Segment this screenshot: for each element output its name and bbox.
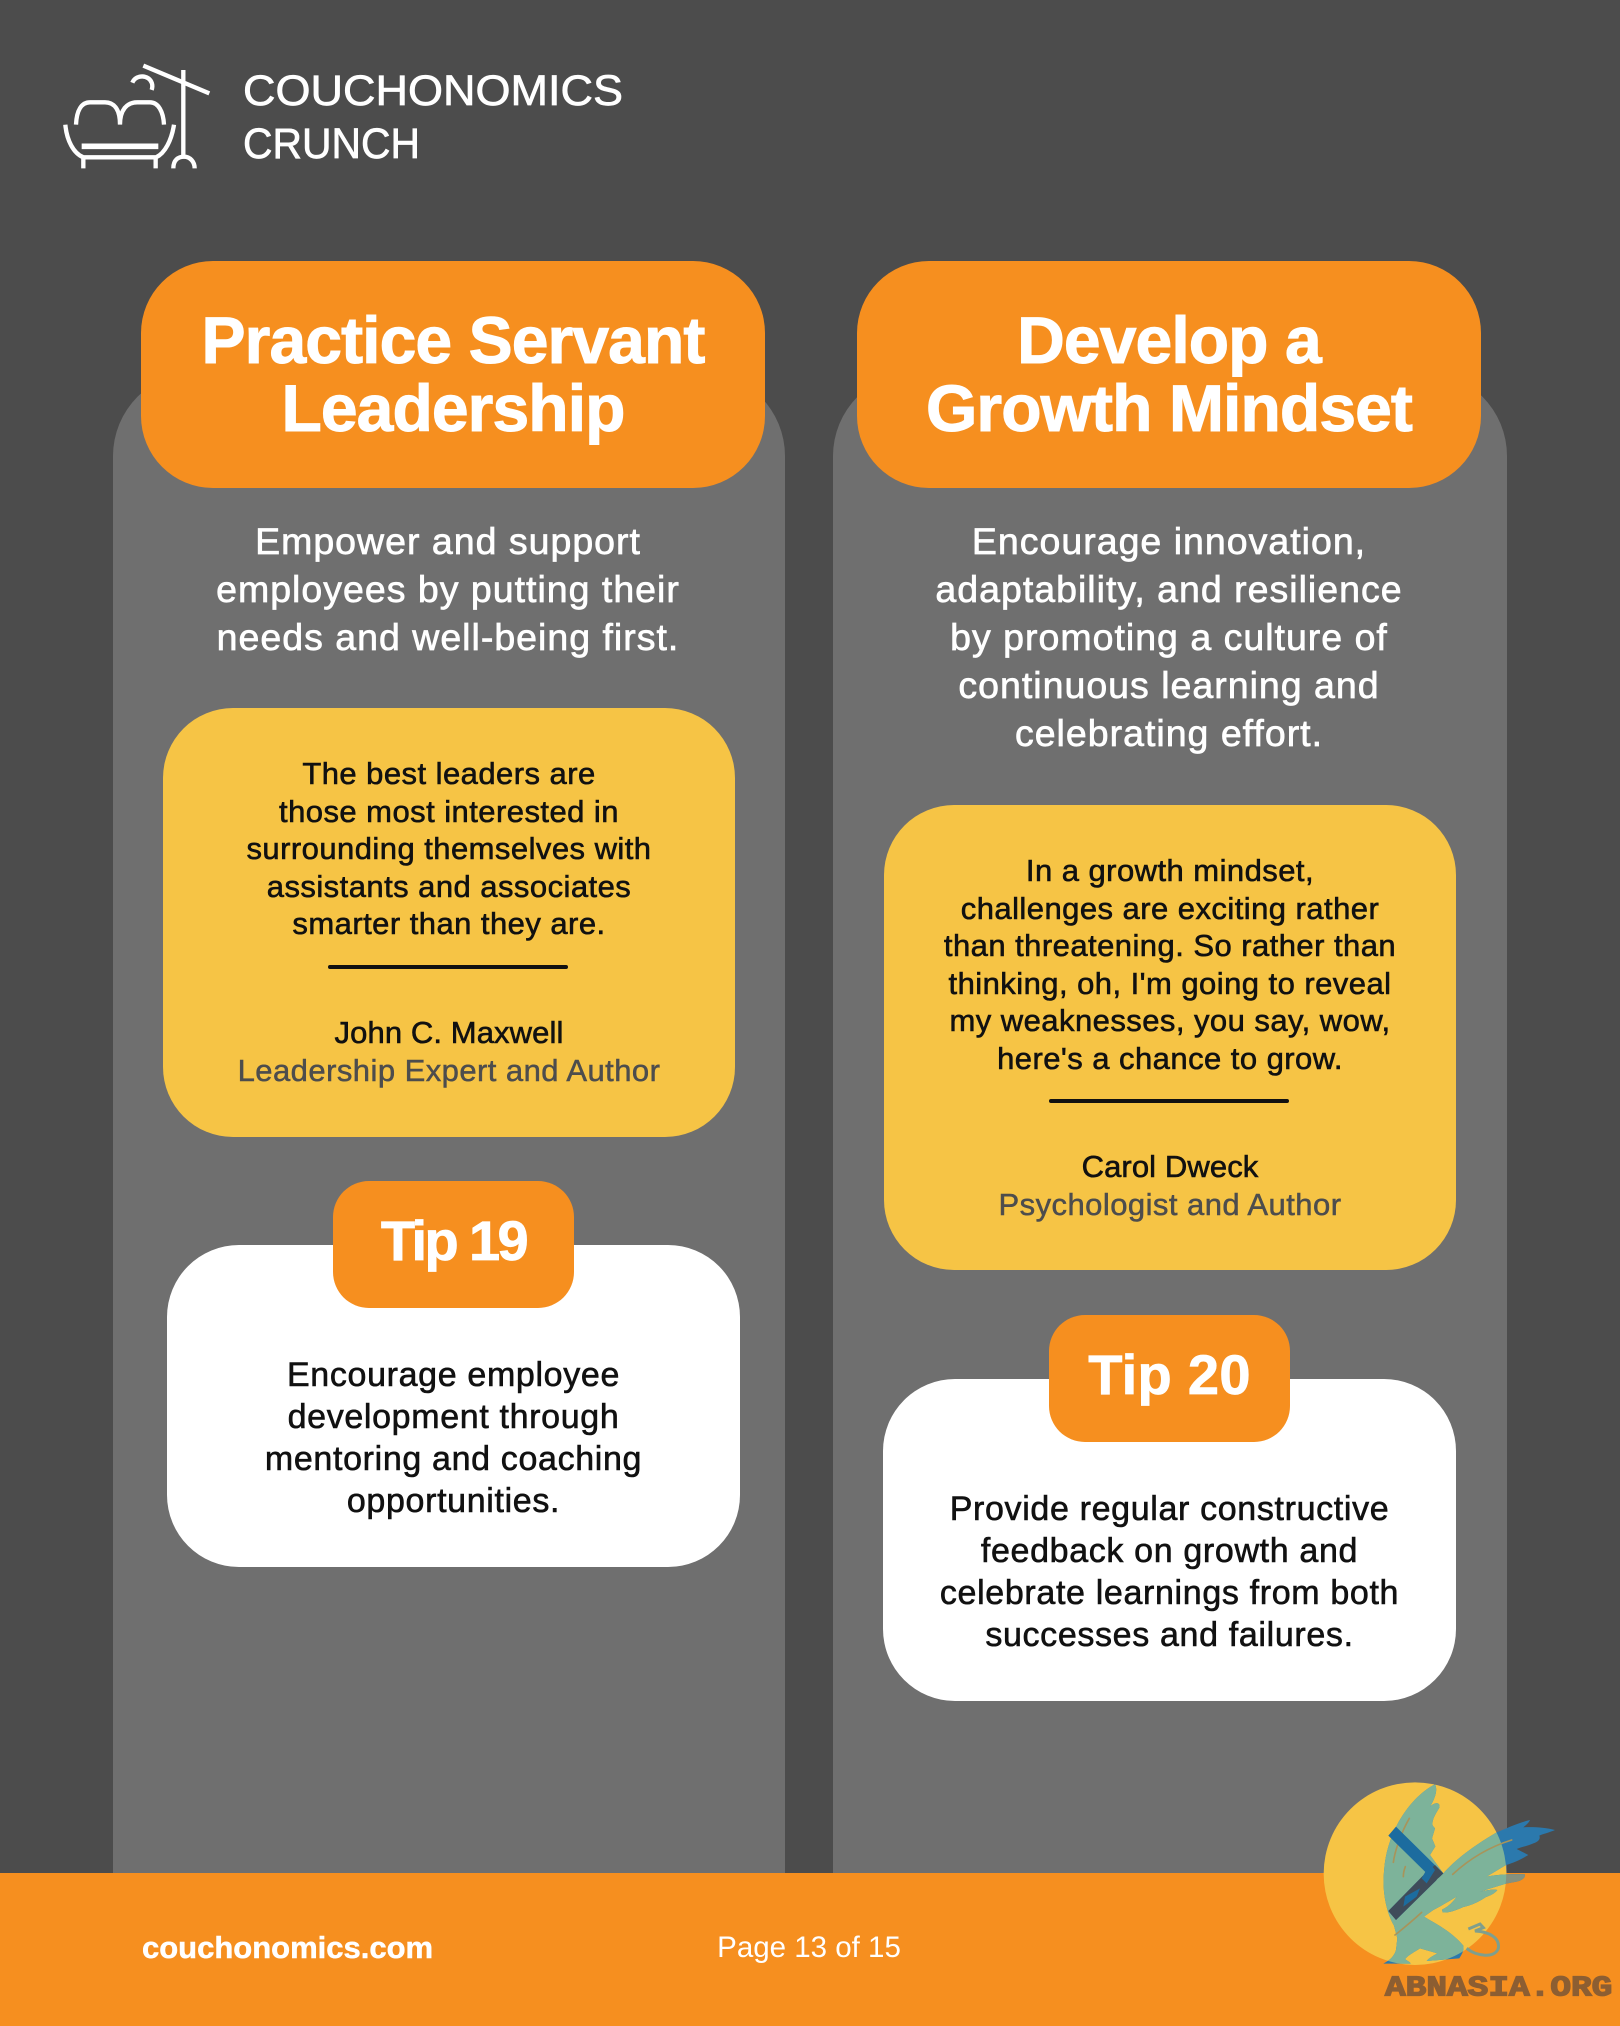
text block: right description: Encourage innovation, bbox=[972, 520, 1366, 562]
badge: Tip 19 bbox=[333, 1181, 574, 1308]
footer bar bbox=[0, 1873, 1620, 2026]
logo text: CRUNCH bbox=[243, 120, 420, 168]
logo text: COUCHONOMICS bbox=[243, 67, 623, 115]
heading: Develop a Growth Mindset bbox=[857, 261, 1481, 488]
quote text: smarter than they are. bbox=[292, 906, 606, 941]
tip text: successes and failures. bbox=[985, 1616, 1354, 1654]
text block: left description bbox=[216, 520, 680, 658]
panel: tip 20 text card bbox=[883, 1379, 1456, 1701]
text block: right description: continuous learning and bbox=[958, 664, 1380, 706]
tip text: opportunities. bbox=[347, 1482, 560, 1520]
heading: Practice Servant Leadership bbox=[141, 261, 765, 488]
logo text bbox=[243, 67, 623, 168]
panel: left column background bbox=[113, 372, 785, 1892]
quote text: my weaknesses, you say, wow, bbox=[949, 1003, 1391, 1038]
badge: Tip 20 bbox=[1049, 1315, 1290, 1442]
text block: right description bbox=[935, 520, 1403, 754]
text block: left description: employees by putting their bbox=[216, 568, 680, 610]
tip text: Encourage employee bbox=[287, 1356, 620, 1394]
footer website: couchonomics.com bbox=[142, 1930, 433, 1965]
quote text bbox=[246, 756, 652, 941]
logo bbox=[63, 64, 623, 168]
watermark: griffin emblem bbox=[1324, 1782, 1612, 2004]
panel: Carol Dweck quote bbox=[884, 805, 1456, 1270]
tip text bbox=[940, 1490, 1399, 1654]
heading: Practice Servant Leadership: Practice Servant bbox=[202, 303, 704, 377]
tip text bbox=[265, 1356, 642, 1520]
quote text: In a growth mindset, bbox=[1026, 853, 1314, 888]
panel: John C. Maxwell quote bbox=[163, 708, 735, 1137]
text block: right description: celebrating effort. bbox=[1015, 712, 1323, 754]
griffin silhouette bbox=[1383, 1784, 1555, 1964]
quote text bbox=[944, 853, 1396, 1076]
chevron mark bbox=[1388, 1827, 1443, 1920]
quote text: The best leaders are bbox=[302, 756, 596, 791]
griffin tail bbox=[1467, 1924, 1499, 1955]
heading: Practice Servant Leadership: Leadership bbox=[281, 371, 625, 445]
quote text: thinking, oh, I'm going to reveal bbox=[949, 966, 1391, 1001]
quote text: those most interested in bbox=[279, 794, 619, 829]
panel: right column background bbox=[833, 372, 1507, 1892]
badge: Tip 20: Tip 20 bbox=[1088, 1343, 1251, 1406]
wing over chevron tip bbox=[1420, 1873, 1444, 1903]
quote attribution: Psychologist and Author bbox=[999, 1187, 1341, 1222]
quote attribution: Carol Dweck bbox=[1082, 1149, 1258, 1184]
quote attribution: John C. Maxwell bbox=[335, 1015, 563, 1050]
tip text: feedback on growth and bbox=[981, 1532, 1358, 1570]
icon: couch and floor lamp bbox=[65, 66, 209, 168]
quote text: challenges are exciting rather bbox=[961, 891, 1379, 926]
text block: left description: Empower and support bbox=[255, 520, 641, 562]
feather accents bbox=[1393, 1818, 1512, 1935]
text block: left description: needs and well-being first. bbox=[217, 616, 679, 658]
heading: Develop a Growth Mindset: Develop a bbox=[1017, 303, 1321, 377]
quote attribution: Leadership Expert and Author bbox=[238, 1053, 660, 1088]
heading: Develop a Growth Mindset: Growth Mindset bbox=[926, 371, 1412, 445]
quote attribution bbox=[238, 1015, 660, 1088]
panel: tip 19 text card bbox=[167, 1245, 740, 1567]
quote text: than threatening. So rather than bbox=[944, 928, 1396, 963]
tip text: development through bbox=[288, 1398, 619, 1436]
footer page number: Page 13 of 15 bbox=[717, 1931, 901, 1964]
text block: right description: by promoting a culture of bbox=[950, 616, 1388, 658]
watermark text: ABNASIA.ORG bbox=[1385, 1971, 1612, 2004]
tip text: celebrate learnings from both bbox=[940, 1574, 1399, 1612]
badge: Tip 19: Tip 19 bbox=[381, 1209, 526, 1272]
quote text: surrounding themselves with bbox=[246, 831, 652, 866]
text block: right description: adaptability, and resilience bbox=[935, 568, 1403, 610]
quote text: here's a chance to grow. bbox=[997, 1041, 1343, 1076]
quote attribution bbox=[999, 1149, 1341, 1222]
tip text: mentoring and coaching bbox=[265, 1440, 642, 1478]
quote text: assistants and associates bbox=[267, 869, 631, 904]
tip text: Provide regular constructive bbox=[950, 1490, 1389, 1528]
